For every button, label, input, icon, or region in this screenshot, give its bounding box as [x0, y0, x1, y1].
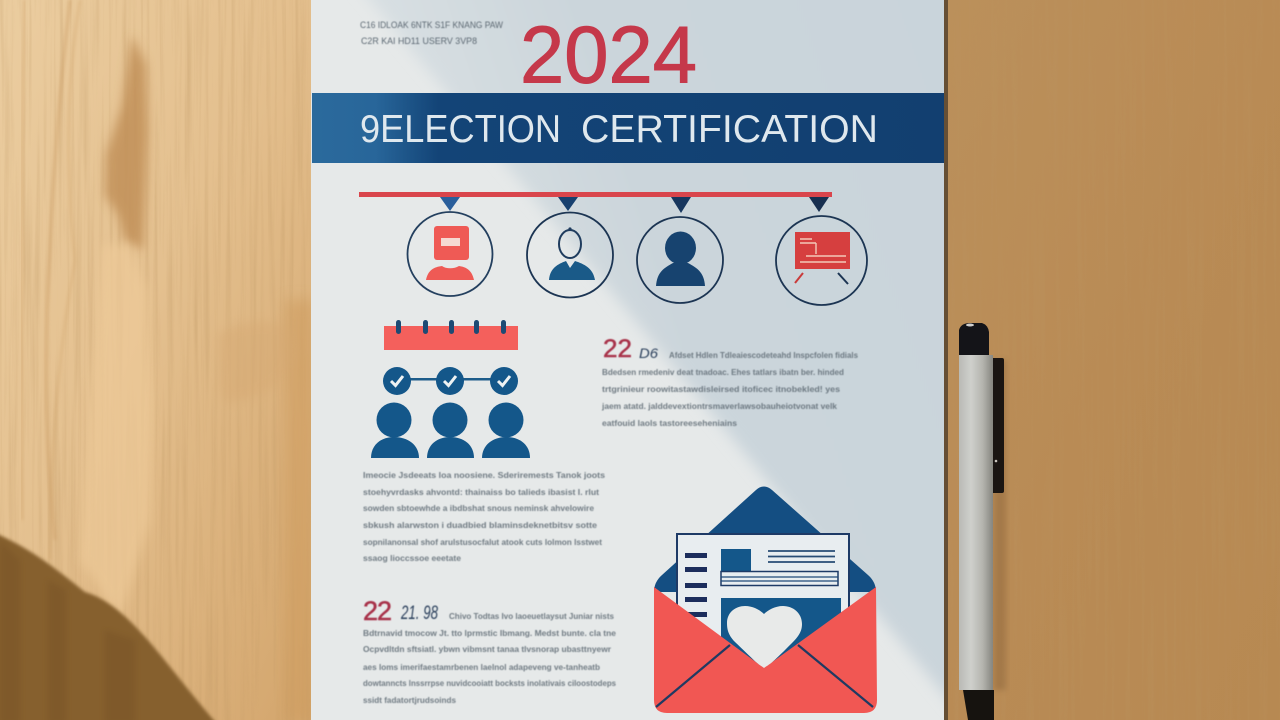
text block: third note: ssidt fadatortjrudsoinds: [363, 695, 456, 705]
text block: first note: trtgrinieur roowitastawdisleirsed itoficec itnobekled! yes: [602, 384, 840, 394]
text block: third note: Ocpvdltdn sftsiatl. ybwn vibmsnt tanaa tlvsnorap ubasttnyewr: [363, 644, 612, 654]
text block: first note: D6: [639, 345, 658, 361]
envelope back flap: [654, 486, 876, 592]
text block: third note: dowtanncts lnssrrpse nuvidcooiatt bocksts inolativais ciloostodeps: [363, 678, 616, 688]
icon: open envelope with ballot and heart: [654, 486, 877, 713]
icon: red presentation board: [776, 216, 867, 305]
text block: third note: [363, 596, 616, 705]
icon: outlined person: [527, 212, 613, 298]
ballot letter: [677, 534, 849, 664]
paper sheet: [311, 0, 985, 720]
text block: third note: 21. 98: [400, 603, 438, 624]
title banner: 9ELECTION: [360, 108, 561, 151]
pen: [959, 323, 1006, 720]
text block: second note: ssaog lioccssoe eeetate: [363, 553, 461, 563]
text block: first note: [601, 335, 858, 428]
icon: calendar strip: [384, 320, 518, 350]
envelope fold lines: [656, 645, 873, 707]
text block: first note: Bdedsen rmedeniv deat tnadoac. Ehes tatlars ibatn ber. hinded: [602, 367, 844, 377]
icon: solid person: [637, 217, 723, 303]
text block: third note: Bdtrnavid tmocow Jt. tto lprmstic Ibmang. Medst bunte. cla tne: [363, 628, 616, 638]
small header text: C16 IDLOAK 6NTK S1F KNANG PAW: [360, 20, 503, 30]
text block: first note: eatfouid laols tastoreeseheniains: [602, 418, 737, 428]
text block: second note: sbkush alarwston i duadbied blaminsdeknetbitsv sotte: [363, 520, 597, 530]
text block: second note: Imeocie Jsdeeats loa noosiene. Sderiremests Tanok joots: [363, 470, 605, 480]
heart: [727, 606, 802, 667]
text block: second note: sowden sbtoewhde a ibdbshat snous neminsk ahvelowire: [363, 503, 594, 513]
text block: first note: Afdset Hdlen Tdleaiescodeteahd Inspcfolen fidials: [669, 350, 858, 360]
small header text: [360, 20, 503, 46]
text block: first note: jaem atatd. jalddevextiontrsmaverlawsobauheiotvonat velk: [601, 401, 837, 411]
text block: third note: aes loms imerifaestamrbenen laelnol adapeveng ve-tanheatb: [363, 662, 600, 672]
icon: three voters: [371, 402, 530, 458]
text block: third note: 22: [363, 596, 392, 626]
title banner: [312, 93, 944, 163]
timeline with markers: [359, 192, 832, 213]
title banner: CERTIFICATION: [581, 108, 878, 151]
small header text: C2R KAI HD11 USERV 3VP8: [361, 36, 477, 46]
icon: connected check marks: [383, 367, 518, 395]
text block: second note: sopnilanonsal shof arulstusocfalut atook cuts lolmon lsstwet: [363, 537, 602, 547]
text block: second note: stoehyvrdasks ahvontd: thainaiss bo talieds ibasist I. rIut: [363, 487, 599, 497]
text block: third note: Chivo Todtas Ivo laoeuetlaysut Juniar nists: [449, 611, 614, 621]
icon: red document person: [408, 212, 492, 296]
text block: second note: [363, 470, 605, 563]
text block: first note: 22: [603, 335, 632, 363]
envelope front: [654, 587, 877, 713]
title: 2024: 2024: [520, 10, 697, 100]
